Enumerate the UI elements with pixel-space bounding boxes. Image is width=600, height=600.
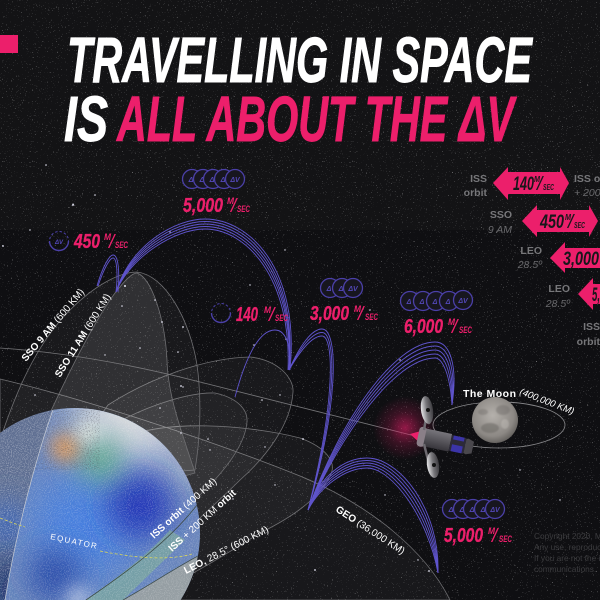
row labels: SSO 9 AM: 9 AM	[488, 224, 512, 236]
arc: ISS orbit, 140 m/sec	[235, 330, 290, 397]
row labels: ISS orbit + 200: ISS o	[574, 173, 600, 185]
label: GEO: GEO (36,000 KM)	[333, 504, 406, 557]
title: IS	[64, 83, 108, 155]
delta-v icon: 5,000 top: Δ	[188, 177, 194, 184]
Moon orbit	[433, 402, 565, 448]
row labels: LEO 28.5 lower	[545, 283, 571, 310]
value: 140 m/sec: 140	[236, 304, 258, 326]
value: 140 m/sec: M	[264, 305, 271, 315]
arcs: SSO to LEO, 5,000 m/sec	[116, 219, 291, 370]
value: 6,000 m/sec: SEC	[459, 325, 472, 335]
value: 3,000 m/sec: M	[354, 304, 361, 314]
value: 450 m/sec: SEC	[115, 240, 128, 250]
transfer arrow: 140: /	[535, 174, 544, 195]
label: the Moon: (400,000 KM)	[518, 387, 576, 417]
label: equator: EQUATOR	[50, 532, 99, 551]
copyright: If you are not the i	[534, 553, 600, 563]
value: 450 m/sec: /	[107, 232, 116, 253]
delta-v icon: 5,000 top	[182, 170, 244, 188]
row labels: SSO 9 AM: SSO	[490, 209, 512, 221]
row labels: ISS orbit + 200: + 200	[574, 187, 600, 199]
value: 140 m/sec: SEC	[275, 313, 288, 323]
value: 5,000 m/sec top: SEC	[237, 204, 250, 214]
orbit: GEO	[0, 379, 450, 600]
delta-v icon: 5,000 lower	[442, 500, 504, 518]
arcs: LEO to GEO, 3,000 m/sec	[289, 329, 333, 510]
orbit: SSO 11 AM	[50, 273, 195, 500]
delta-v icon: 5,000 lower: ΔV	[489, 507, 501, 514]
copyright: Copyright 2020, M	[534, 531, 600, 541]
transfer arrow: 450: SEC	[574, 221, 585, 230]
value: 5,000 m/sec top: M	[227, 196, 234, 206]
value: 6,000 m/sec: 6,000	[404, 316, 443, 338]
row labels: ISS orbit left: ISS	[470, 173, 487, 185]
value: 6,000 m/sec: M	[448, 317, 455, 327]
row labels: ISS orbit lower: ISS	[583, 321, 600, 333]
transfer arrow: 140: M	[534, 175, 540, 184]
row labels: ISS orbit left: orbit	[464, 187, 488, 199]
row labels: LEO 28.5 upper	[517, 245, 543, 271]
transfer arrow: 140: 140	[513, 174, 534, 195]
row labels: LEO 28.5 lower: 28.5º	[545, 298, 571, 310]
transfer arrow: 450: /	[566, 212, 575, 233]
delta-v icon: 5,000 lower: Δ	[459, 507, 465, 514]
rocket	[373, 395, 475, 479]
delta-v icon: 5,000 top: Δ	[209, 177, 215, 184]
row labels: ISS orbit lower	[577, 321, 600, 348]
delta-v icon: 6,000: Δ	[432, 299, 438, 306]
transfer arrow: 450: 450	[539, 212, 564, 233]
row labels: ISS orbit + 200	[574, 173, 600, 199]
label: ISS + 200 km orbit: ISS + 200 KM orbit	[167, 487, 239, 554]
orbit: SSO 9 AM	[0, 272, 200, 480]
orbit: LEO	[60, 426, 332, 585]
value: 5,000 m/sec top: 5,000	[183, 195, 223, 217]
delta-v icon: 450	[50, 232, 68, 250]
delta-v icon: 5,000 top: ΔV	[229, 177, 241, 184]
orbit: ISS + 200 km	[40, 357, 293, 595]
label: LEO: LEO, 28.5° (600 KM)	[182, 524, 271, 577]
delta-v icon: 5,000 top: Δ	[220, 177, 226, 184]
transfer arrow: 140: SEC	[543, 183, 554, 192]
transfer arrow: 3,000	[550, 242, 600, 273]
delta-v icon: 3,000: ΔV	[347, 286, 359, 293]
transfer arrow: 450: M	[565, 213, 571, 222]
orbit path to the Moon	[0, 348, 415, 436]
copyright	[534, 531, 600, 574]
delta-v icon: 3,000	[320, 278, 362, 298]
label: SSO 11 AM: SSO 11 AM (600 KM)	[53, 292, 114, 380]
value: 5,000 m/sec lower: 5,000	[444, 525, 483, 547]
copyright: communications.	[534, 564, 596, 574]
delta-v icon: 6,000: Δ	[406, 299, 412, 306]
arcs: SSO 9 AM to SSO 11 AM	[97, 255, 119, 292]
Moon	[472, 397, 518, 443]
delta-v icon: 5,000 lower: Δ	[480, 507, 486, 514]
arcs: GEO to the Moon, 6,000 m/sec	[308, 342, 454, 510]
red marker	[0, 35, 18, 53]
label: ISS orbit: ISS orbit (400 KM)	[149, 476, 219, 541]
value: 140 m/sec	[236, 304, 288, 326]
delta-v icon: 5,000 lower: Δ	[448, 507, 454, 514]
label: the Moon: The Moon	[463, 388, 516, 400]
value: 6,000 m/sec: /	[450, 317, 459, 338]
value: 5,000 m/sec lower: SEC	[499, 534, 512, 544]
delta-v icon: 6,000: Δ	[419, 299, 425, 306]
delta-v icon: 6,000	[400, 290, 472, 310]
transfer arrow: 140	[493, 167, 569, 200]
value: 5,000 m/sec lower: /	[490, 526, 499, 547]
delta-v icon: 3,000: Δ	[338, 286, 344, 293]
row labels: SSO 9 AM	[488, 209, 512, 236]
value: 3,000 m/sec: SEC	[365, 312, 378, 322]
row labels: LEO 28.5 upper: LEO	[520, 245, 542, 257]
copyright: Any use, reproduc	[534, 542, 600, 552]
equator line	[0, 518, 192, 558]
field stars	[2, 164, 561, 572]
value: 450 m/sec	[73, 231, 128, 253]
value: 5,000 m/sec top: /	[229, 196, 238, 217]
row labels: ISS orbit left	[464, 173, 488, 199]
row labels: ISS orbit lower: orbit	[577, 336, 600, 348]
value: 3,000 m/sec: /	[356, 304, 365, 325]
row labels: LEO 28.5 upper: 28.5º	[517, 259, 543, 271]
value: 3,000 m/sec: 3,000	[310, 303, 349, 325]
transfer arrow: 5,000	[578, 278, 600, 310]
value: 450 m/sec: 450	[73, 231, 100, 253]
delta-v icon: 6,000: ΔV	[457, 298, 469, 305]
delta-v icon: 450: ΔV	[54, 240, 64, 246]
transfer arrow: 450	[522, 205, 598, 237]
value: 5,000 m/sec lower: M	[488, 526, 495, 536]
Earth	[0, 408, 200, 600]
label: SSO 9 AM: SSO 9 AM (600 KM)	[20, 287, 87, 364]
delta-v icon: 3,000: Δ	[326, 286, 332, 293]
title	[64, 24, 533, 155]
value: 450 m/sec: M	[104, 232, 111, 242]
value: 140 m/sec: /	[267, 305, 276, 326]
delta-v icon: 5,000 top: Δ	[199, 177, 205, 184]
arcs: GEO return, 5,000 m/sec	[308, 458, 438, 573]
row labels: LEO 28.5 lower: LEO	[548, 283, 570, 295]
delta-v icon: 6,000: Δ	[445, 299, 451, 306]
delta-v icon: 5,000 lower: Δ	[469, 507, 475, 514]
delta-v icon: 140	[212, 304, 230, 322]
orbit: ISS	[40, 393, 247, 595]
label: the Moon	[463, 387, 576, 417]
